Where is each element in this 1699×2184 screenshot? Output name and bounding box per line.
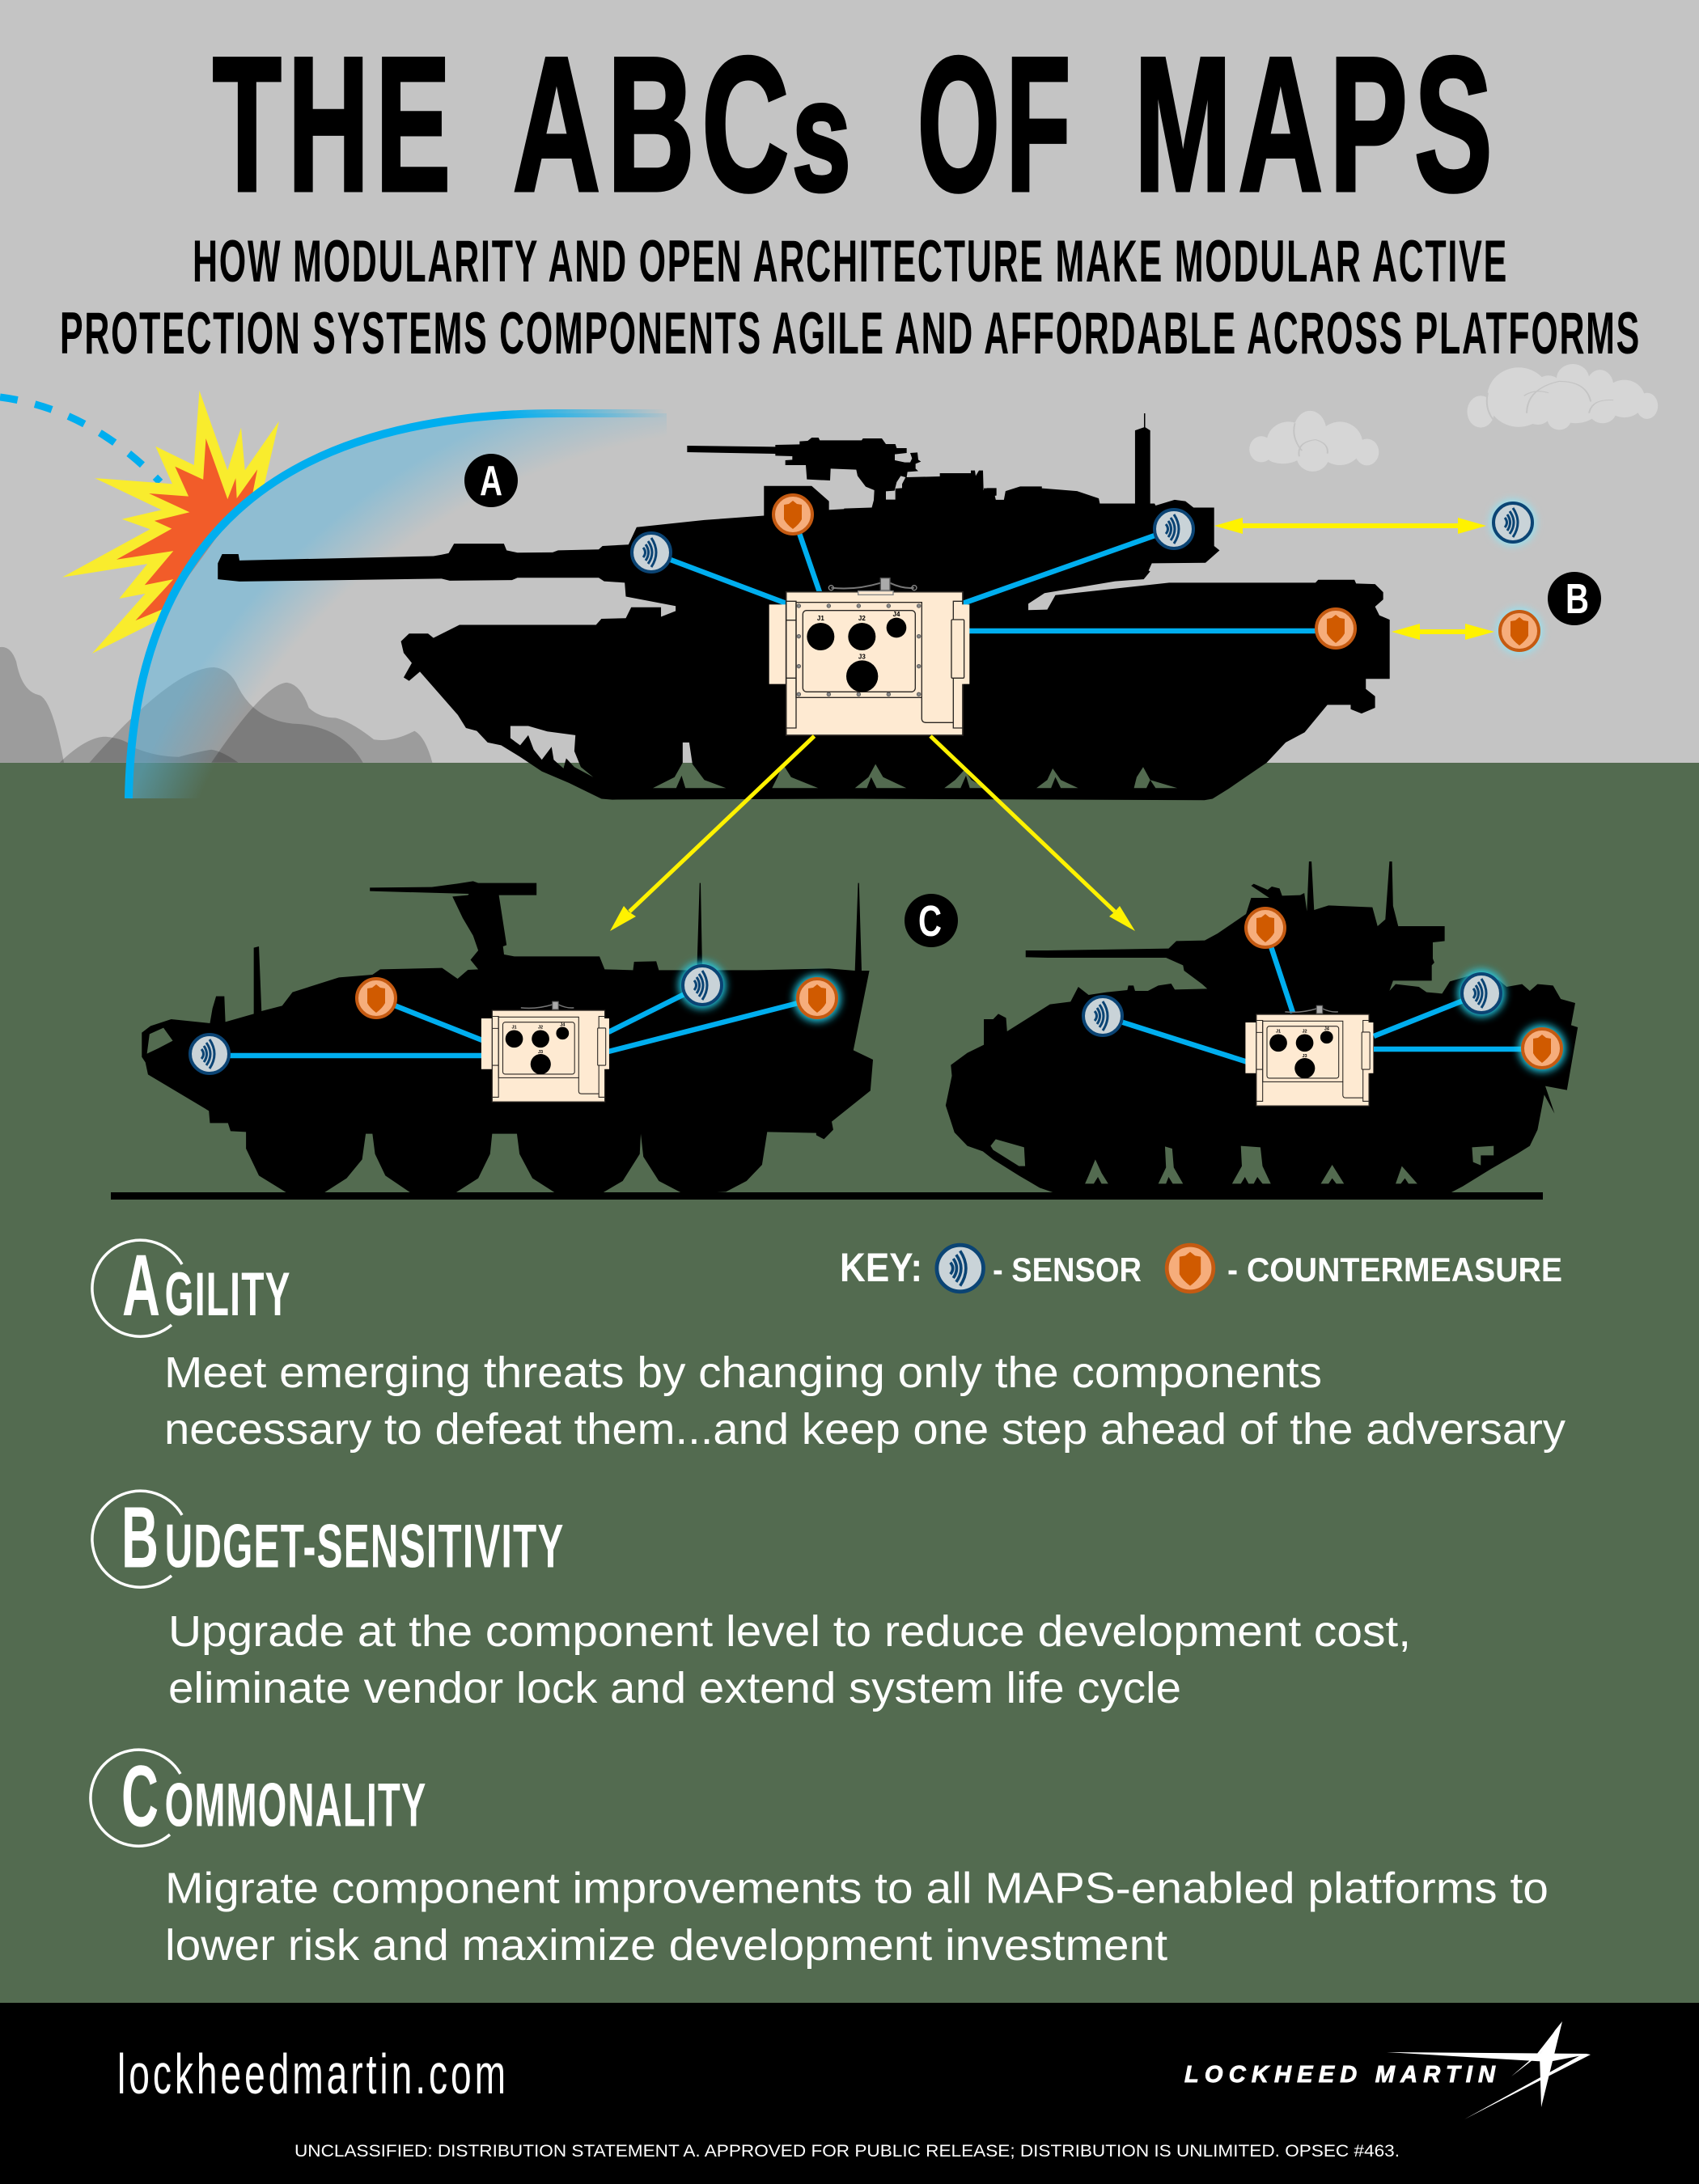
tracked vehicle silhouette [946, 861, 1578, 1193]
glow: wheeled sensor [679, 962, 726, 1009]
explosion [62, 391, 279, 654]
MAPS controller box: main tank: J3 [858, 654, 866, 661]
section: agility [92, 1236, 1566, 1454]
section: commonality [91, 1747, 1549, 1970]
key legend: - SENSOR [993, 1251, 1142, 1289]
glow: tracked sensor [1458, 970, 1505, 1017]
label B [1548, 572, 1601, 625]
upgraded countermeasure [1500, 612, 1539, 650]
sensor: wheeled upgraded [683, 966, 722, 1005]
glow: tracked countermeasure [1519, 1025, 1566, 1072]
MAPS controller box: tracked vehicle: J2 [1303, 1030, 1307, 1035]
glow: upgraded countermeasure [1497, 608, 1542, 654]
icon: Lockheed Martin star [1387, 2021, 1591, 2119]
tank antenna [1144, 413, 1146, 438]
label A: A [480, 458, 502, 505]
arrow: sensor swap [1214, 518, 1486, 534]
MAPS controller box: wheeled vehicle: J2 [538, 1026, 543, 1031]
MAPS controller box: wheeled vehicle: J4 [560, 1022, 566, 1027]
title: OF [917, 18, 1077, 231]
MAPS controller box: tracked vehicle [1245, 1005, 1373, 1106]
upgraded sensor [1494, 503, 1532, 542]
MAPS controller box: main tank: J1 [817, 615, 824, 622]
sensor: tank front [632, 533, 671, 572]
sensor: tank rear [1155, 510, 1193, 548]
MAPS controller box: tracked vehicle: J4 [1324, 1026, 1330, 1031]
countermeasure: tracked upgraded [1523, 1029, 1561, 1068]
label C [905, 894, 958, 947]
clouds [1249, 364, 1658, 472]
ground line [111, 1192, 1543, 1200]
section: budget-sensitivity: eliminate vendor lock and extend system life cycle [168, 1664, 1181, 1712]
footer band [0, 2003, 1699, 2184]
section: agility: GILITY [165, 1260, 291, 1329]
arrow: to wheeled vehicle [610, 736, 814, 931]
MAPS controller box: main tank [769, 578, 969, 735]
connection lines: main tank [651, 514, 1327, 631]
MAPS controller box: wheeled vehicle: J1 [511, 1026, 517, 1031]
section: agility: Meet emerging threats by changing only the components [164, 1348, 1322, 1397]
key legend [840, 1245, 1562, 1292]
Lockheed Martin wordmark: LOCKHEED MARTIN [1184, 2062, 1496, 2088]
countermeasure: tank turret [773, 495, 812, 534]
section: agility: A [122, 1236, 160, 1334]
glow: wheeled countermeasure [794, 975, 841, 1022]
countermeasure: wheeled upgraded [798, 979, 837, 1018]
glow: upgraded sensor [1490, 500, 1536, 545]
label A [464, 454, 518, 507]
section: commonality: OMMONALITY [165, 1771, 427, 1840]
countermeasure: tracked turret [1246, 908, 1285, 947]
protective dome A [129, 413, 667, 798]
main battle tank silhouette [218, 427, 1390, 800]
sensor: tracked front [1083, 997, 1122, 1035]
countermeasure: tank rear [1316, 609, 1355, 648]
section: budget-sensitivity: B [121, 1488, 159, 1586]
title: ABC [513, 18, 796, 231]
wheeled vehicle silhouette [142, 881, 873, 1193]
MAPS controller box: main tank: J2 [858, 615, 866, 622]
arrow: countermeasure swap [1392, 624, 1494, 640]
title: THE [213, 18, 457, 231]
sensor: tracked upgraded [1462, 974, 1501, 1013]
title [213, 18, 1499, 231]
label B: B [1566, 576, 1589, 623]
arrow: to tracked vehicle [930, 736, 1135, 931]
MAPS controller box: wheeled vehicle [481, 1001, 609, 1102]
countermeasure: wheeled mid [357, 979, 396, 1018]
section: commonality: C [121, 1747, 159, 1845]
sensor: wheeled front [190, 1035, 229, 1073]
MAPS controller box: main tank: J4 [893, 611, 900, 618]
connection lines: wheeled vehicle [210, 985, 817, 1056]
connection lines: tracked vehicle [1103, 927, 1542, 1062]
incoming threat trajectory [0, 397, 160, 482]
key legend: - COUNTERMEASURE [1227, 1251, 1562, 1289]
MAPS controller box: tracked vehicle: J3 [1303, 1054, 1307, 1059]
title: s [792, 47, 858, 224]
MAPS controller box: wheeled vehicle: J3 [538, 1050, 543, 1055]
website: lockheedmartin.com [117, 2042, 509, 2106]
mountains [0, 647, 432, 763]
MAPS controller box: tracked vehicle: J1 [1276, 1030, 1281, 1035]
section: commonality: lower risk and maximize development investment [165, 1921, 1167, 1970]
tank machine gun and commander mount [687, 438, 1003, 526]
section: budget-sensitivity [92, 1488, 1411, 1712]
ground background [0, 763, 1699, 2003]
section: commonality: Migrate component improvements to all MAPS-enabled platforms to [165, 1864, 1549, 1913]
subtitle [60, 229, 1641, 366]
section: budget-sensitivity: UDGET-SENSITIVITY [165, 1513, 565, 1581]
key legend: KEY: [840, 1245, 922, 1290]
label C: C [918, 897, 942, 946]
section: agility: necessary to defeat them...and keep one step ahead of the adversary [164, 1405, 1566, 1454]
disclaimer: UNCLASSIFIED: DISTRIBUTION STATEMENT A. APPROVED FOR PUBLIC RELEASE; DISTRIBUTION IS UNLIMITED. OPSEC #463. [294, 2142, 1400, 2161]
section: budget-sensitivity: Upgrade at the component level to reduce development cost, [168, 1607, 1411, 1656]
sky background [0, 0, 1699, 763]
